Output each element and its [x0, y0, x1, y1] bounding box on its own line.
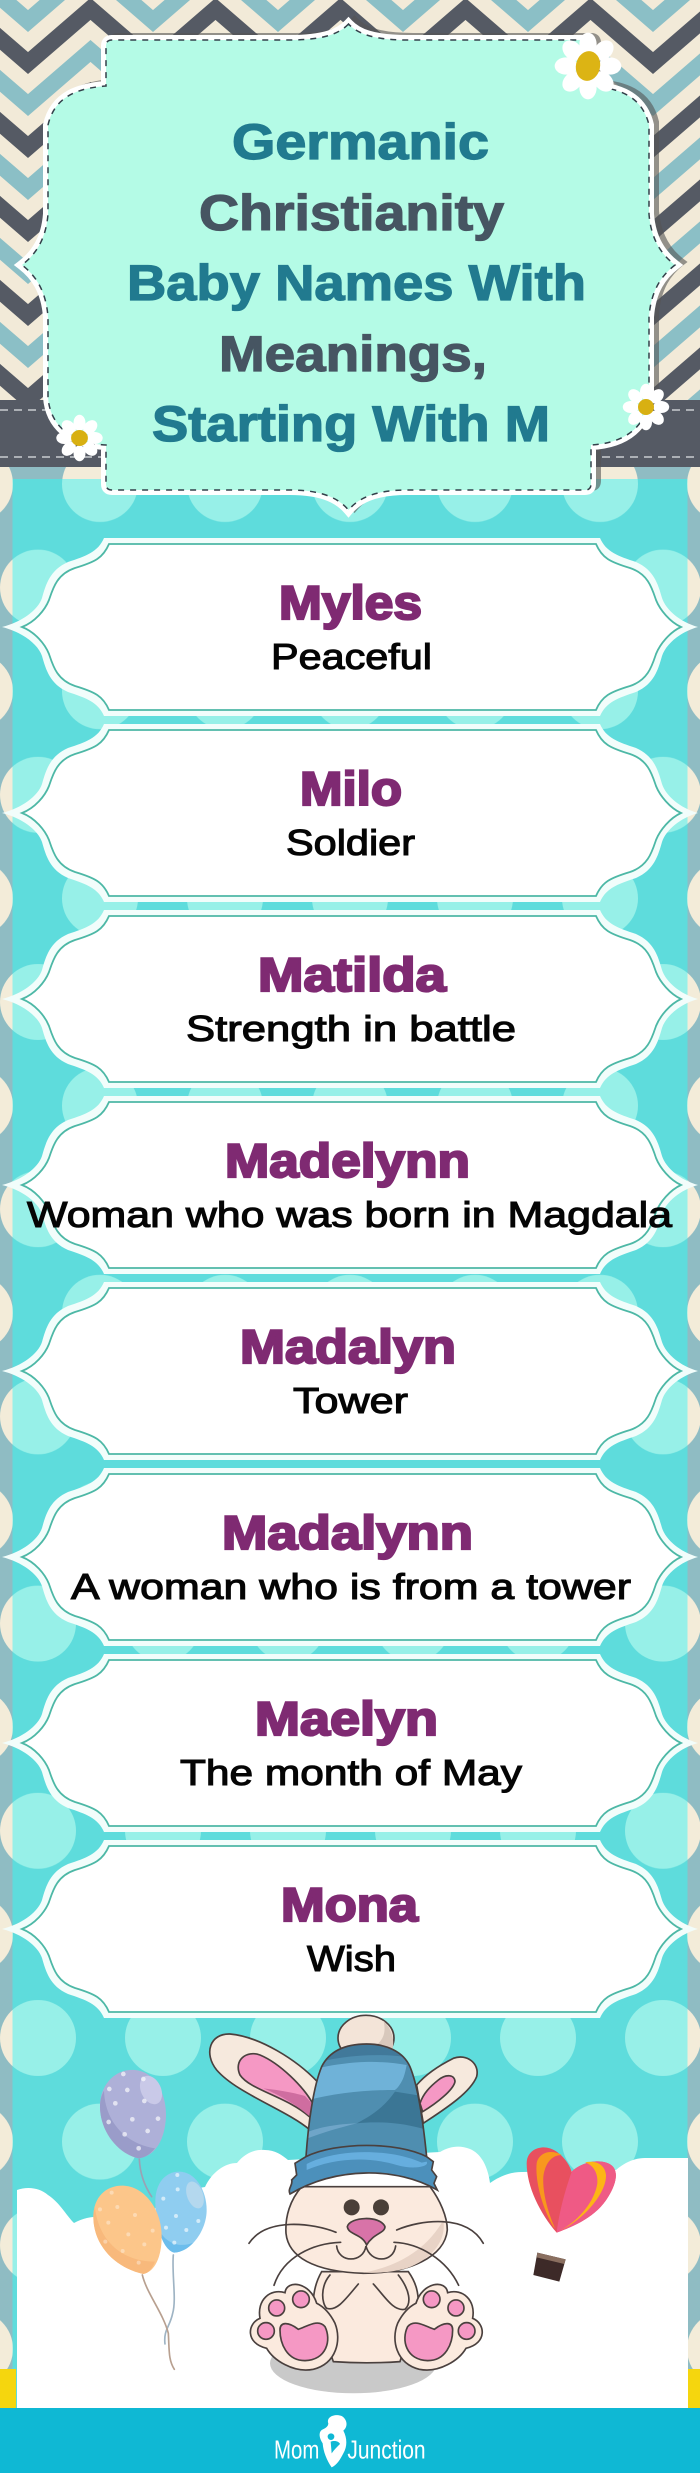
name: Madalyn: Madalyn	[240, 1320, 456, 1373]
body	[313, 2272, 418, 2363]
logo mark	[320, 2415, 347, 2467]
pompom	[338, 2015, 394, 2061]
logo wordmark: Junction	[347, 2434, 426, 2464]
illustration: bunny in a striped hat	[210, 2015, 483, 2393]
panel: Mona	[2, 1840, 698, 2018]
ground shadow	[270, 2333, 437, 2393]
panel: Milo	[2, 724, 698, 902]
nose and mouth	[337, 2219, 396, 2259]
title: Starting With M	[152, 396, 550, 452]
heart envelope	[527, 2147, 616, 2233]
left ear	[210, 2034, 317, 2130]
arms	[323, 2275, 409, 2310]
title: Baby Names With	[127, 255, 586, 311]
right foot	[395, 2284, 482, 2370]
meaning: Strength in battle: Strength in battle	[186, 1008, 516, 1049]
name: Mona: Mona	[281, 1878, 419, 1931]
striped hat	[305, 2043, 428, 2156]
basket	[533, 2253, 566, 2282]
name: Matilda: Matilda	[258, 948, 447, 1001]
background: teal polka dot panel	[12, 479, 688, 2408]
logo: MomJunction	[274, 2415, 426, 2467]
blue balloon	[155, 2172, 207, 2253]
icon: daisy bottom left	[56, 415, 103, 461]
purple balloon	[100, 2070, 166, 2158]
white clouds	[17, 2147, 688, 2408]
title: Meanings,	[219, 326, 487, 382]
title frame	[22, 21, 681, 510]
meaning: Woman who was born in Magdala: Woman who was born in Magdala	[27, 1194, 673, 1235]
illustration: balloons	[93, 2070, 207, 2369]
title: Christianity	[199, 185, 504, 241]
icon: daisy top right	[555, 33, 621, 99]
footer bar	[0, 2408, 700, 2473]
name: Madelynn: Madelynn	[225, 1134, 470, 1187]
panel: Madelynn	[2, 1096, 698, 1274]
panel: Madalyn	[2, 1282, 698, 1460]
background: grey stitched ribbon band	[0, 400, 700, 467]
panel: Madalynn	[2, 1468, 698, 1646]
meaning: Wish: Wish	[307, 1938, 396, 1979]
panel: Myles	[2, 538, 698, 716]
head	[286, 2187, 447, 2273]
panel: Matilda	[2, 910, 698, 1088]
background: chevron pattern	[0, 0, 700, 400]
eyes	[344, 2199, 389, 2215]
background: polka dot border strip	[0, 467, 700, 2369]
title: Germanic	[232, 114, 489, 170]
right ear	[417, 2057, 477, 2123]
name: Maelyn: Maelyn	[255, 1692, 438, 1745]
balloon strings	[139, 2159, 174, 2369]
icon: daisy bottom right	[623, 384, 669, 430]
whiskers	[249, 2222, 483, 2285]
left foot	[250, 2284, 338, 2370]
meaning: Soldier: Soldier	[286, 822, 415, 863]
yellow corner marks	[0, 2369, 700, 2408]
meaning: The month of May: The month of May	[180, 1752, 522, 1793]
logo wordmark: Mom	[274, 2434, 319, 2464]
name: Madalynn: Madalynn	[222, 1506, 473, 1559]
meaning: Tower: Tower	[293, 1380, 408, 1421]
meaning: A woman who is from a tower: A woman who is from a tower	[71, 1566, 631, 1607]
orange balloon	[93, 2186, 162, 2274]
name: Myles: Myles	[279, 576, 422, 629]
illustration: heart hot air balloon	[527, 2147, 616, 2282]
logo wordmark	[274, 2434, 426, 2464]
title	[127, 114, 586, 452]
name: Milo: Milo	[300, 762, 402, 815]
meaning: Peaceful: Peaceful	[271, 636, 432, 677]
panel: Maelyn	[2, 1654, 698, 1832]
hat brim	[289, 2145, 437, 2194]
